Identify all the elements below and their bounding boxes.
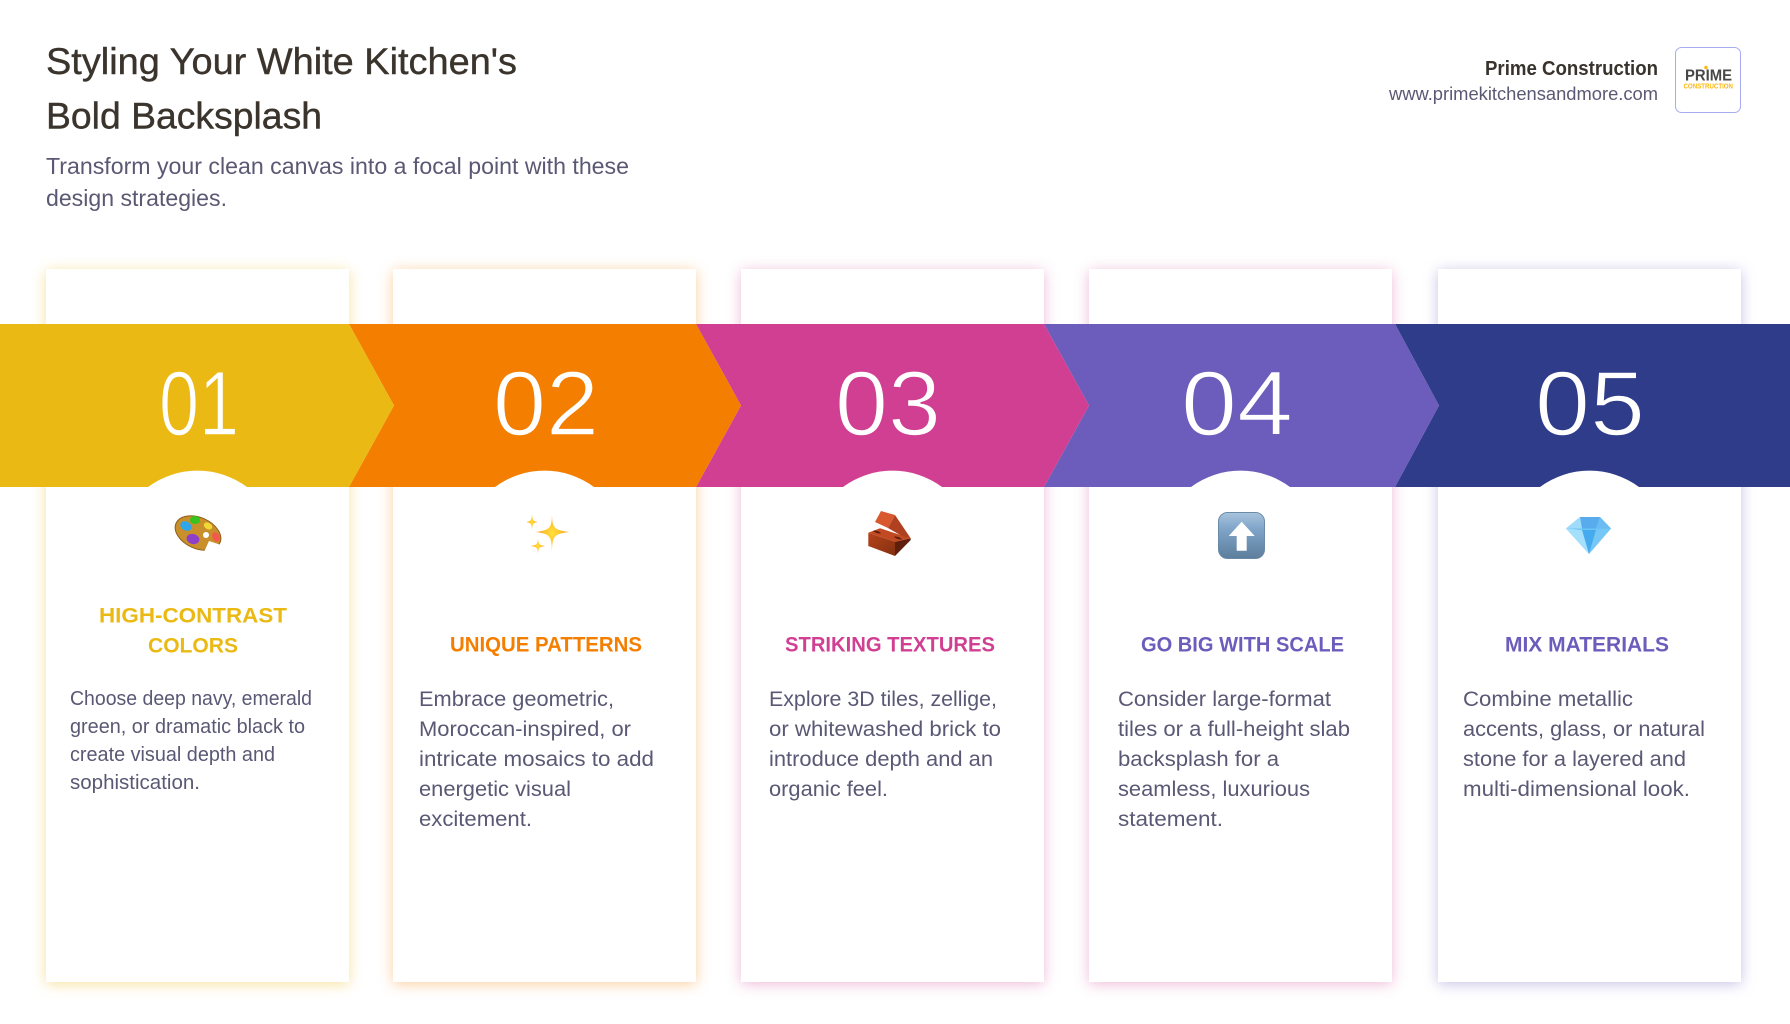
body text: or whitewashed brick to: [769, 718, 1001, 741]
chevron 3: 03: [835, 353, 941, 455]
icon: up arrow button: [1218, 512, 1264, 558]
panel: card 4 go big with scale: [1089, 269, 1392, 982]
body text: create visual depth and: [70, 744, 275, 766]
chevron banner: [0, 324, 1790, 487]
heading: MIX MATERIALS: [1505, 634, 1669, 657]
heading: HIGH-CONTRAST: [99, 605, 287, 628]
chevron 1: [0, 324, 394, 487]
body text: green, or dramatic black to: [70, 716, 305, 738]
chevron 5: [1395, 324, 1790, 487]
body text: stone for a layered and: [1463, 748, 1686, 771]
body text: [769, 688, 1001, 801]
chevron 2: [349, 324, 741, 487]
icon: brick: [868, 511, 911, 556]
body text: Embrace geometric,: [419, 688, 614, 711]
logo: [1676, 48, 1740, 112]
subtitle: design strategies.: [46, 185, 227, 211]
body text: backsplash for a: [1118, 748, 1279, 771]
title: Bold Backsplash: [46, 96, 322, 136]
heading: UNIQUE PATTERNS: [450, 634, 642, 657]
heading: GO BIG WITH SCALE: [1141, 634, 1344, 657]
body text: excitement.: [419, 808, 532, 831]
panel: card 3 striking textures: [741, 269, 1044, 982]
heading: COLORS: [148, 635, 238, 658]
panel: card 5 mix materials: [1438, 269, 1741, 982]
subtitle: [46, 153, 629, 211]
body text: Moroccan-inspired, or: [419, 718, 631, 741]
chevron 3: [696, 324, 1089, 487]
title: [46, 41, 517, 136]
brand block: [1388, 48, 1740, 112]
icon: artist palette: [170, 509, 226, 557]
body text: introduce depth and an: [769, 748, 993, 771]
body text: Consider large-format: [1118, 688, 1331, 711]
body text: [419, 688, 654, 831]
body text: Combine metallic: [1463, 688, 1633, 711]
body text: statement.: [1118, 808, 1223, 831]
body text: [1118, 688, 1350, 831]
heading: [99, 605, 287, 658]
icon: sparkles: [526, 512, 569, 555]
subtitle: Transform your clean canvas into a focal point with these: [46, 153, 629, 179]
chevron 1: 01: [159, 353, 239, 455]
panel: card 2 unique patterns: [393, 269, 696, 982]
icon: gem: [1566, 517, 1611, 554]
website: www.primekitchensandmore.com: [1388, 84, 1658, 104]
body text: sophistication.: [70, 772, 200, 794]
body text: multi-dimensional look.: [1463, 778, 1690, 801]
body text: accents, glass, or natural: [1463, 718, 1705, 741]
title: Styling Your White Kitchen's: [46, 41, 517, 82]
body text: [70, 688, 312, 794]
chevron 4: [1044, 324, 1439, 487]
body text: organic feel.: [769, 778, 888, 801]
body text: [1463, 688, 1705, 801]
body text: seamless, luxurious: [1118, 778, 1310, 801]
chevron 2: 02: [493, 353, 599, 455]
company name: Prime Construction: [1485, 58, 1658, 80]
logo: PRIME: [1685, 68, 1732, 84]
panel: card 1 high-contrast colors: [46, 269, 349, 982]
body text: Choose deep navy, emerald: [70, 688, 312, 710]
body text: intricate mosaics to add: [419, 748, 654, 771]
chevron 5: 05: [1535, 353, 1645, 455]
body text: tiles or a full-height slab: [1118, 718, 1350, 741]
body text: energetic visual: [419, 778, 571, 801]
heading: STRIKING TEXTURES: [785, 634, 995, 657]
chevron 4: 04: [1181, 353, 1293, 455]
logo: CONSTRUCTION: [1684, 82, 1733, 90]
body text: Explore 3D tiles, zellige,: [769, 688, 997, 711]
